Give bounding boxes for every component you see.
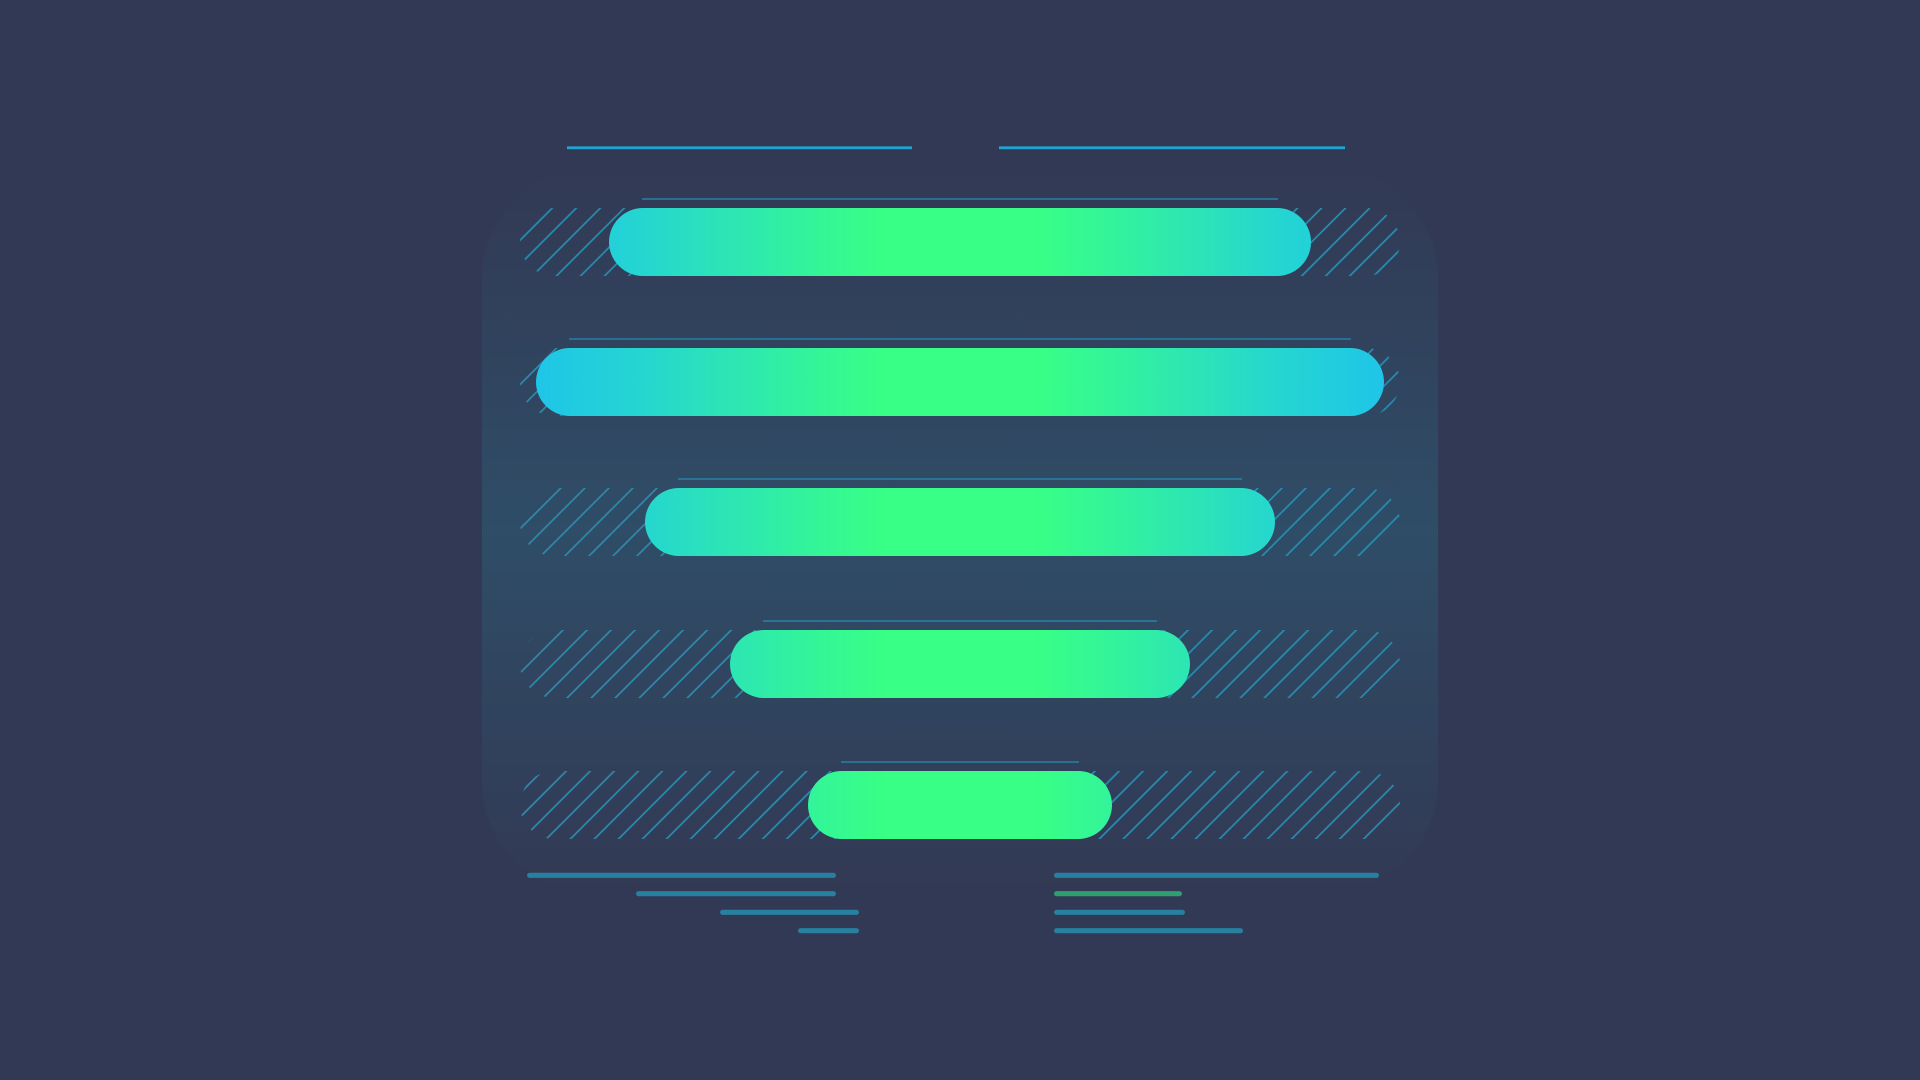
- top rule left: [567, 146, 912, 149]
- row 1 bar: [609, 198, 1311, 276]
- hatched track pattern for all rows: [520, 208, 1400, 839]
- row 4 bar: [730, 620, 1190, 698]
- row 3 bar: [645, 478, 1275, 556]
- top rule right: [999, 146, 1345, 149]
- panel: rounded gradient backdrop: [482, 168, 1438, 892]
- legend lines right: [1054, 873, 1379, 933]
- row 2 bar: [536, 338, 1384, 416]
- legend lines left: [527, 873, 859, 933]
- row 5 bar: [808, 761, 1112, 839]
